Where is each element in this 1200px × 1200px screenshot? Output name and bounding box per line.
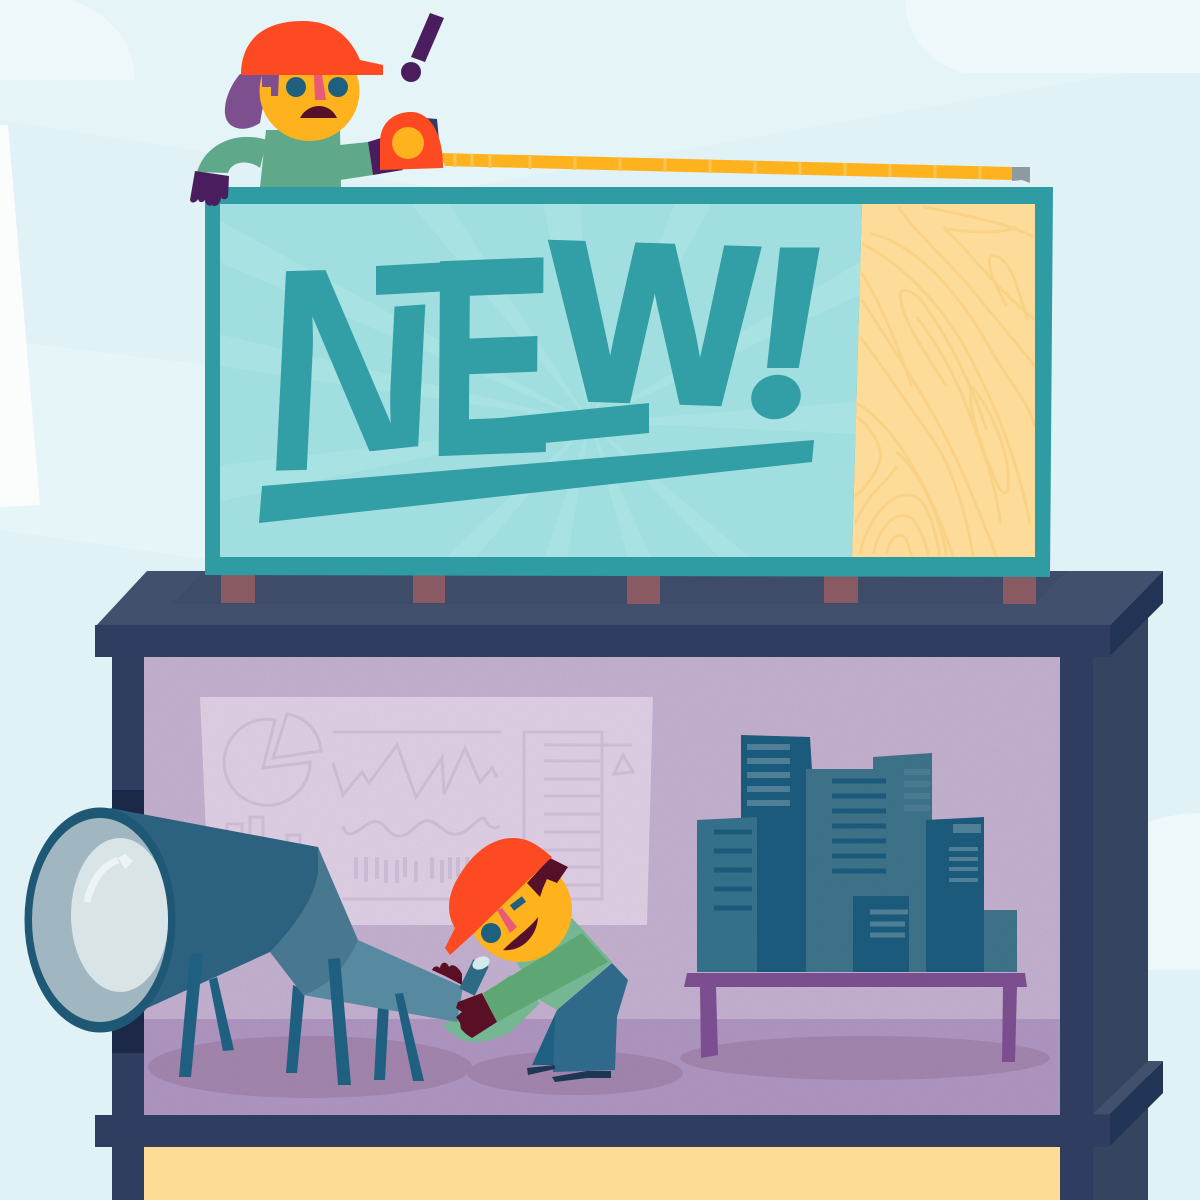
floor shadows — [148, 1036, 1050, 1098]
head — [468, 858, 572, 962]
sunburst rays — [220, 204, 860, 557]
shirt — [517, 918, 612, 1010]
right tower — [926, 817, 984, 972]
headline letter W: W — [551, 194, 759, 453]
tape reel — [392, 127, 424, 159]
focus knob — [467, 963, 481, 992]
centre tower — [806, 769, 873, 972]
list box — [343, 732, 602, 899]
tape blade — [440, 153, 1012, 180]
left glove — [190, 171, 229, 206]
wood panel — [852, 204, 1035, 557]
line chart — [333, 745, 497, 797]
glove — [456, 993, 497, 1038]
tape case — [380, 112, 443, 170]
hair — [527, 858, 568, 897]
floor slab — [95, 1115, 1110, 1147]
triangle marker — [614, 755, 633, 774]
billboard frame — [205, 187, 1053, 577]
roof front — [95, 625, 1110, 657]
left arm — [197, 137, 267, 173]
model city on table — [697, 735, 1017, 972]
sign support posts — [221, 574, 1036, 604]
eyepiece tube — [290, 940, 463, 1022]
room floor — [144, 1019, 1060, 1115]
shoes — [527, 1065, 611, 1082]
top rule — [333, 730, 501, 734]
headline letter E: E — [428, 199, 553, 513]
roof top — [95, 571, 1163, 627]
mouth — [300, 106, 337, 118]
nose — [497, 908, 517, 933]
smile — [503, 917, 538, 950]
telescope body — [110, 808, 318, 1028]
low block — [984, 910, 1017, 972]
tall tower — [741, 735, 812, 972]
whiteboard charts — [224, 714, 633, 899]
rear telescope legs — [209, 977, 389, 1080]
tube collar — [270, 847, 358, 995]
room wall — [144, 657, 1060, 1019]
building pillars — [112, 657, 1093, 1200]
hair lock — [262, 74, 279, 96]
right arm — [340, 142, 373, 180]
table — [684, 973, 1027, 1062]
headline letter N: N — [257, 205, 446, 533]
small front block — [853, 896, 909, 972]
lower room — [144, 1147, 1060, 1200]
hard hat — [241, 21, 383, 75]
lens reflection — [71, 838, 169, 992]
roof side — [1110, 571, 1163, 656]
right glove — [368, 138, 403, 175]
building side column — [1093, 600, 1148, 1200]
exclamation mark — [401, 13, 444, 82]
front telescope legs — [179, 953, 424, 1085]
headline exclamation mark: ! — [726, 196, 849, 474]
head — [260, 41, 360, 141]
lens highlight — [87, 854, 133, 902]
lens rim — [24, 808, 176, 1032]
bar chart — [226, 816, 302, 844]
tape tip — [1012, 167, 1030, 183]
back glove fingers — [432, 963, 462, 985]
headline exclamation mark — [751, 248, 820, 420]
panel background — [220, 204, 862, 557]
whiteboard — [200, 697, 653, 925]
left tower — [697, 817, 757, 972]
nose — [314, 74, 326, 100]
hair — [225, 74, 279, 129]
room — [144, 657, 1060, 1115]
back right tower — [873, 753, 932, 972]
building — [95, 571, 1163, 1200]
eye — [481, 923, 501, 943]
wood grain — [855, 207, 1035, 557]
arm band — [483, 933, 608, 1022]
pie chart — [224, 714, 321, 805]
lens glass — [32, 818, 168, 1022]
hard hat — [445, 838, 552, 955]
eyes — [286, 77, 348, 97]
wink eye — [512, 899, 524, 908]
tick marks — [356, 857, 467, 883]
telescope — [24, 808, 463, 1085]
headline letter E — [376, 199, 649, 513]
headline underline — [259, 440, 814, 523]
headline NEW! — [257, 194, 849, 533]
curved lower arm — [443, 975, 540, 1042]
worker with tape measure — [190, 13, 1030, 206]
billboard — [180, 187, 1053, 600]
worker adjusting telescope — [445, 838, 628, 1082]
wave chart — [343, 818, 500, 836]
grain texture — [144, 657, 1060, 1115]
sign shadow on roof — [172, 571, 1067, 604]
pants — [553, 963, 628, 1072]
torso — [260, 130, 341, 187]
back leg — [532, 1010, 557, 1065]
